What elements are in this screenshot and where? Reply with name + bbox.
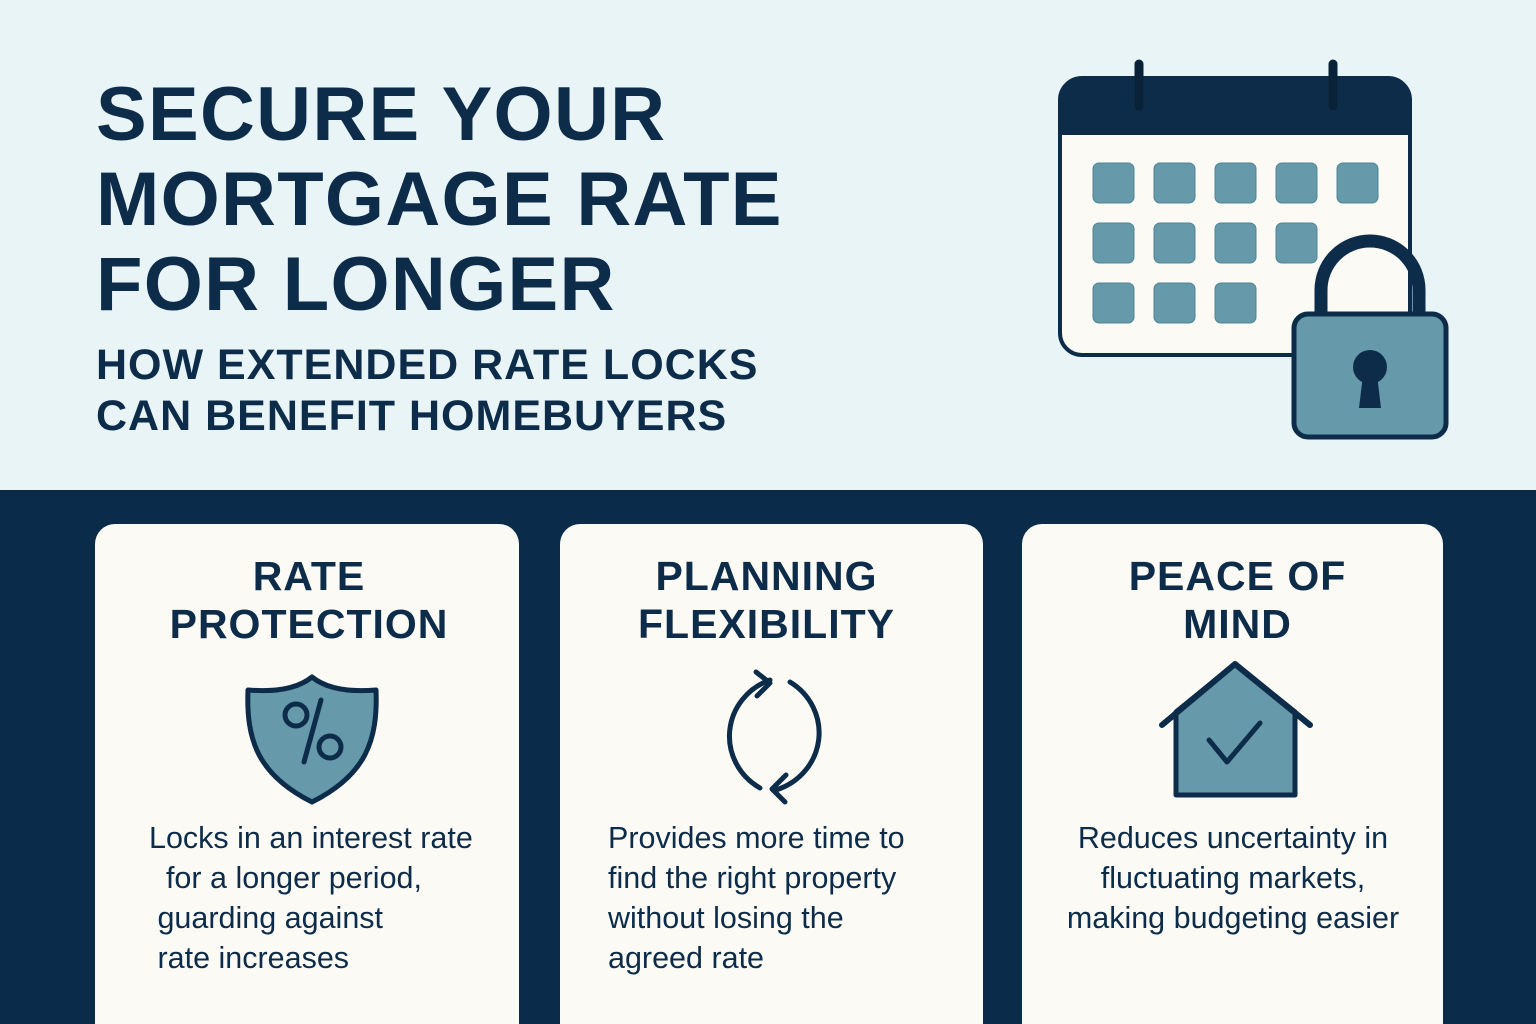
- panel: rate protection: [95, 524, 519, 1024]
- icon: calendar with lock: [1058, 60, 1448, 440]
- title: MORTGAGE RATE: [96, 157, 783, 242]
- icon: refresh arrows: [726, 670, 822, 804]
- heading: planning flexibility: FLEXIBILITY: [638, 601, 895, 647]
- subtitle: [96, 341, 758, 440]
- text: rate protection: rate increases: [157, 941, 349, 975]
- dark bottom band: [0, 490, 1536, 1024]
- subtitle: CAN BENEFIT HOMEBUYERS: [96, 392, 727, 440]
- panel: planning flexibility: [560, 524, 983, 1024]
- panel: peace of mind: [1022, 524, 1443, 1024]
- heading: peace of mind: MIND: [1183, 601, 1292, 647]
- heading: rate protection: PROTECTION: [170, 601, 448, 647]
- text: rate protection: [149, 821, 473, 975]
- text: planning flexibility: without losing the: [608, 901, 844, 935]
- icon: house with check: [1159, 660, 1313, 798]
- text: rate protection: for a longer period,: [166, 861, 422, 895]
- title: FOR LONGER: [96, 242, 616, 327]
- text: planning flexibility: [608, 821, 905, 975]
- text: planning flexibility: agreed rate: [608, 941, 764, 975]
- heading: peace of mind: PEACE OF: [1129, 553, 1346, 599]
- text: peace of mind: Reduces uncertainty in: [1078, 821, 1388, 855]
- icon: shield with percent: [245, 674, 379, 804]
- text: rate protection: guarding against: [157, 901, 383, 935]
- heading: planning flexibility: [638, 553, 895, 647]
- text: planning flexibility: find the right property: [608, 861, 896, 895]
- heading: rate protection: [170, 553, 448, 647]
- heading: peace of mind: [1129, 553, 1346, 647]
- subtitle: HOW EXTENDED RATE LOCKS: [96, 341, 758, 389]
- text: peace of mind: [1067, 821, 1399, 935]
- text: peace of mind: making budgeting easier: [1067, 901, 1399, 935]
- text: peace of mind: fluctuating markets,: [1101, 861, 1365, 895]
- text: planning flexibility: Provides more time to: [608, 821, 905, 855]
- heading: planning flexibility: PLANNING: [655, 553, 878, 599]
- title: SECURE YOUR: [96, 72, 666, 157]
- heading: rate protection: RATE: [253, 553, 365, 599]
- title: [96, 72, 783, 327]
- text: rate protection: Locks in an interest rate: [149, 821, 473, 855]
